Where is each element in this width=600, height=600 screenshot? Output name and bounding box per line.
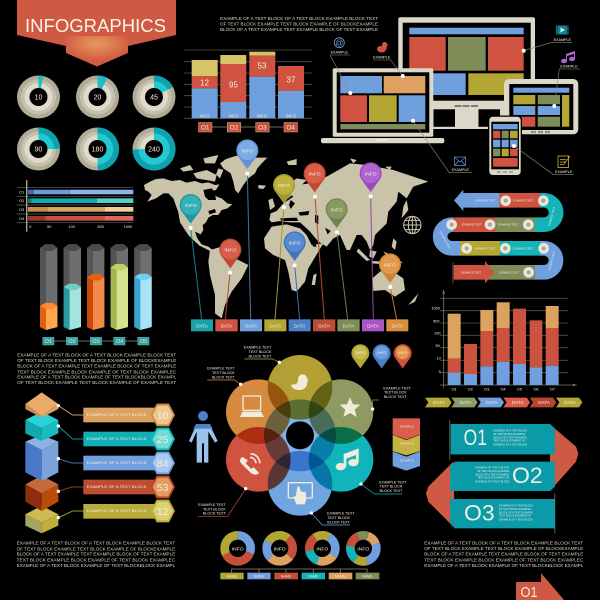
- devices illustration: [321, 17, 578, 176]
- map inland seas: [203, 188, 331, 247]
- horizontal bar chart: O1: [19, 190, 24, 194]
- person figure: [189, 411, 218, 463]
- icon: bird: [377, 42, 388, 52]
- overlapping circles: [226, 355, 373, 516]
- ribbon tag: [393, 418, 420, 471]
- map pins and data boxes: [180, 139, 408, 331]
- gauge 20: 20: [94, 94, 101, 102]
- step 02: EXAMPLE OF A TEXT BLOCK: [475, 480, 510, 483]
- text block: top: [220, 16, 378, 32]
- step 03: EXAMPLE OF A TEXT BLOCK: [499, 504, 533, 507]
- stacked bar chart: right: O1: [451, 388, 457, 392]
- venn labels: TEXT BLOCK: [384, 391, 407, 395]
- icon: envelope: [454, 157, 466, 166]
- small pins: INFO: [398, 351, 407, 355]
- ribbon labels: EXAMPLE TEXT: [547, 206, 556, 227]
- icon: at sign: @: [335, 38, 343, 48]
- donut gauges: [17, 76, 176, 170]
- text block: left middle: OF TEXT BLOCK EXAMPLE TEXT BLOCK EXAMPLE OF EXAMPLE TEXT: [17, 380, 177, 385]
- column labels: O1: [45, 339, 52, 345]
- text block: bottom right: EXAMPLE OF A TEXT BLOCK EXAMPLE OF TEXT BLOCKBLOCK EXAMPL: [424, 563, 584, 568]
- bar 25: 25: [157, 435, 169, 446]
- icon: notepad: [558, 156, 570, 168]
- text block: bottom left: EXAMPLE OF A TEXT BLOCK OF A TEXT BLOCK EXAMPLE BLOCK TEXT: [17, 541, 176, 546]
- text block: bottom right: OF TEXT BLOCK EXAMPLE TEXT BLOCK EXAMPLE OF BLOCKEXAMPLE: [424, 546, 583, 551]
- step 01: EXAMPLE OF A TEXT BLOCK: [493, 430, 528, 433]
- data boxes: DATA: [269, 323, 282, 328]
- step 03: OF TEXT BLOCK EXAMPLE: [499, 508, 531, 511]
- ribbon labels: EXAMPLE TEXT: [498, 223, 519, 227]
- bar 12: EXAMPLE OF A TEXT BLOCK: [87, 509, 147, 513]
- phone: [488, 116, 522, 176]
- gauge 10: [17, 76, 60, 118]
- venn labels: BLOCK TEXT: [212, 375, 235, 379]
- gauge 90: [17, 128, 60, 170]
- icon: film: [556, 26, 568, 34]
- text block: bottom right: BLOCK OF A TEXT EXAMPLE TEXT EXAMPLE BLOCK OF TEXT EXAMPLE: [424, 552, 583, 557]
- venn labels: BLOCK TEXT: [249, 354, 272, 358]
- stacked bar chart: top: 53: [258, 62, 267, 70]
- bar 84: 84: [157, 459, 169, 470]
- gauge 180: 180: [92, 146, 103, 154]
- venn labels: EXAMPLE TEXT: [383, 386, 412, 390]
- stacked bar chart: top: 37: [287, 76, 296, 84]
- connector dots: [57, 404, 60, 519]
- name boxes: NAME: [335, 574, 346, 578]
- title banner: INFOGRAPHICS: [25, 16, 166, 36]
- bar 84: EXAMPLE OF A TEXT BLOCK: [87, 461, 147, 465]
- horizontal bar chart: O2: [19, 199, 24, 203]
- 3D column chart: [40, 244, 152, 345]
- pin: north america: [180, 194, 202, 230]
- pin: europe: [273, 174, 295, 209]
- bar 12: [83, 500, 175, 522]
- stacked bar chart: top: [184, 50, 312, 132]
- step 03: [450, 499, 555, 528]
- data boxes: DATA: [318, 323, 331, 328]
- data boxes: DATA: [245, 323, 258, 328]
- column labels: O5: [140, 339, 147, 345]
- venn labels: EXAMPLE TEXT: [327, 512, 355, 516]
- device callouts: EXAMPLE: [373, 56, 391, 60]
- pin: russia east: [360, 162, 382, 198]
- step 01: BLOCK OF A TEXT EXAMPLE: [493, 436, 528, 439]
- stacked bar chart: right: O7: [550, 388, 555, 392]
- ribbon labels: EXAMPLE TEXT: [438, 230, 452, 250]
- small pins: [351, 344, 412, 368]
- ribbon path segments: [440, 200, 556, 272]
- horizontal bar chart: [17, 180, 133, 232]
- icon: laptop: [240, 396, 264, 417]
- donut 2: [261, 530, 298, 567]
- gauge 45: 45: [150, 94, 158, 102]
- stacked bar chart: right: [431, 290, 577, 392]
- text block: top: OF TEXT BLOCK EXAMPLE TEXT BLOCK EXAMPLE OF BLOCKEXAMPLE: [220, 22, 378, 27]
- venn labels: EXAMPLE TEXT: [198, 503, 226, 507]
- bar 53: EXAMPLE OF A TEXT BLOCK: [87, 485, 147, 489]
- cube: brown: [25, 476, 58, 511]
- name boxes: NAME: [362, 574, 373, 578]
- ribbon tag: EXAMPLE: [400, 459, 414, 463]
- data boxes: DATA: [221, 323, 233, 328]
- bar 53: 53: [157, 483, 169, 494]
- stacked bar chart: top: INFO: [286, 114, 297, 118]
- title banner: [17, 0, 176, 66]
- text block: left middle: [17, 352, 177, 385]
- icon: star: [340, 397, 360, 417]
- name boxes: NAME: [254, 574, 265, 578]
- stacked bar chart: top: 12: [200, 78, 209, 88]
- step 03: TEXT BLOCK EXAMPLE OF: [499, 515, 531, 518]
- name boxes: NAME: [227, 574, 238, 578]
- stacked bar chart: top: O1: [201, 124, 210, 132]
- venn labels: TEXT BLOCK: [203, 507, 226, 511]
- device callouts: EXAMPLE: [560, 65, 578, 69]
- step 02: BLOCK OF A TEXT EXAMPLE: [475, 473, 510, 476]
- step 01: [451, 424, 555, 454]
- venn labels: TEXT BLOCK: [327, 516, 351, 520]
- text block: left middle: OF TEXT BLOCK EXAMPLE TEXT BLOCK EXAMPLE OF BLOCKEXAMPLE: [17, 358, 176, 363]
- stacked bar chart: right: 10: [437, 357, 441, 361]
- monitor: [398, 17, 535, 129]
- isometric stack with labelled bars: [25, 392, 175, 533]
- device callouts: EXAMPLE: [555, 170, 573, 174]
- ribbon icons: [446, 195, 549, 278]
- icon: touch screen: [288, 483, 312, 504]
- horizontal bar chart: 1000: [124, 225, 132, 229]
- bar 10: EXAMPLE OF A TEXT BLOCK: [87, 413, 147, 417]
- step 02: EXAMPLE OF A TEXT BLOCK: [475, 467, 510, 470]
- gauge 240: 240: [148, 146, 160, 154]
- horizontal bar chart: 5: [29, 225, 31, 229]
- ribbon labels: EXAMPLE TEXT: [475, 246, 495, 250]
- snake ribbon process: [438, 190, 556, 283]
- icon: phone: [240, 454, 260, 474]
- stacked bar chart: right: O6: [533, 388, 539, 392]
- text block: bottom left: EXAMPLE OF A TEXT BLOCK EXAMPLE OF TEXT BLOCKBLOCK EXAMPL: [17, 563, 176, 568]
- stacked bar chart: right: 5: [439, 370, 441, 374]
- icon: globe: [404, 216, 421, 234]
- gauge 240: [132, 128, 176, 170]
- horizontal bar chart: 100: [69, 225, 75, 229]
- column labels: [43, 337, 149, 345]
- numbered ribbon panel: [426, 420, 578, 533]
- text block: bottom right: TEXT BLOCK EXAMPLE BLOCK EXAMPLE OF TEXT BLOCK EXAMPLEC: [424, 557, 583, 562]
- text block: bottom left: TEXT BLOCK EXAMPLE BLOCK EXAMPLE OF TEXT BLOCK EXAMPLEC: [17, 557, 175, 562]
- text block: bottom right: [424, 540, 584, 568]
- stacked bar chart: top: O2: [230, 124, 239, 132]
- ribbon tag: EXAMPLE: [400, 441, 414, 445]
- step 03: BLOCK OF A TEXT EXAMPLE: [499, 511, 533, 514]
- text block: left middle: EXAMPLE OF A TEXT BLOCK EXAMPLE OF TEXT BLOCKBLOCK EXAMPL: [17, 375, 177, 380]
- venn labels: BLOCK TEXT: [380, 489, 403, 493]
- pin: north america: INFO: [185, 203, 197, 209]
- venn labels: [198, 345, 412, 524]
- data arrow tags: DATA: [538, 400, 551, 405]
- world map: [144, 155, 428, 318]
- gauge 90: 90: [35, 146, 42, 154]
- column labels: O3: [92, 339, 100, 345]
- stacked bar chart: right: 100: [434, 332, 441, 336]
- venn labels: BLOCK TEXT: [203, 512, 226, 516]
- column 4: [111, 244, 128, 330]
- stacked bar chart: top: INFO: [199, 114, 210, 118]
- pin: europe: INFO: [278, 183, 290, 189]
- mini donut charts: INFO: [316, 546, 328, 552]
- device callouts: EXAMPLE: [554, 38, 572, 42]
- stacked bar chart: right: O3: [484, 388, 489, 392]
- ribbon labels: EXAMPLE TEXT: [461, 270, 481, 274]
- data arrow tags: [425, 398, 582, 407]
- name boxes: NAME: [308, 574, 319, 578]
- step 02: OF TEXT BLOCK EXAMPLE: [477, 470, 510, 473]
- cube: orange slab: [25, 392, 58, 418]
- data arrow tags: DATA: [459, 400, 472, 405]
- icon: bird: [291, 374, 309, 390]
- text block: top: EXAMPLE OF A TEXT BLOCK OF A TEXT BLOCK EXAMPLE BLOCK TEXT: [220, 16, 378, 21]
- donut 3: [304, 530, 340, 566]
- ribbon labels: EXAMPLE TEXT: [513, 199, 534, 203]
- text block: bottom right: EXAMPLE OF A TEXT BLOCK OF A TEXT BLOCK EXAMPLE BLOCK TEXT: [424, 540, 584, 545]
- ribbon labels: EXAMPLE TEXT: [547, 250, 556, 271]
- bar 25: [83, 428, 175, 450]
- gauge 45: [132, 76, 176, 118]
- venn labels: BLOCK TEXT: [384, 395, 407, 399]
- venn labels: TEXT BLOCK: [249, 350, 272, 354]
- venn labels: TEXT BLOCK: [380, 485, 403, 489]
- ribbon labels: EXAMPLE TEXT: [513, 246, 534, 250]
- data arrow tags: DATA: [564, 400, 577, 405]
- data boxes: DATA: [196, 323, 209, 328]
- mini donut charts: [220, 530, 381, 579]
- text block: top: BLOCK OF A TEXT EXAMPLE TEXT EXAMPLE BLOCK OF TEXT EXAMPLE: [220, 27, 378, 32]
- pin: africa: INFO: [289, 240, 301, 246]
- data boxes: DATA: [367, 323, 380, 328]
- step 01: EXAMPLE OF A TEXT BLOCK: [493, 443, 528, 446]
- horizontal bar chart: O3: [19, 208, 24, 212]
- mini donut charts: INFO: [232, 546, 244, 552]
- gauge 180: [76, 128, 119, 170]
- column labels: O2: [68, 339, 76, 345]
- data arrow tags: DATA: [512, 400, 524, 405]
- stacked bar chart: top: 95: [229, 80, 238, 90]
- bar 84: [83, 452, 175, 474]
- pin: greenland: INFO: [241, 148, 253, 154]
- step 03: O3: [464, 500, 495, 525]
- column 1: [40, 244, 57, 330]
- device callouts: EXAMPLE: [452, 168, 470, 172]
- venn labels: BLOCK TEXT: [327, 520, 351, 524]
- stacked bar chart: right: O2: [468, 388, 473, 392]
- connector lines: [58, 406, 83, 518]
- icon: music note: [336, 448, 359, 470]
- data boxes: DATA: [294, 323, 306, 328]
- cube: olive: [25, 506, 58, 533]
- step 01: O1: [464, 425, 487, 450]
- stacked bar chart: right: 1000: [431, 307, 440, 311]
- pin: south america: INFO: [224, 248, 236, 254]
- pin: australia: [379, 253, 401, 289]
- data arrow tags: DATA: [485, 400, 498, 405]
- pin: russia west: INFO: [309, 172, 321, 178]
- pin: russia west: [304, 163, 326, 199]
- text block: bottom left: OF TEXT BLOCK EXAMPLE TEXT BLOCK EXAMPLE OF BLOCKEXAMPLE: [17, 546, 175, 551]
- data arrow tags: DATA: [433, 400, 446, 405]
- text block: bottom left: BLOCK OF A TEXT EXAMPLE TEXT EXAMPLE BLOCK OF TEXT EXAMPLE: [17, 552, 175, 557]
- horizontal bar chart: O4: [19, 217, 24, 221]
- stacked bar chart: top: INFO: [257, 114, 268, 118]
- cube: blue: [25, 435, 58, 481]
- bar 53: [83, 476, 175, 498]
- pin: south america: [219, 239, 241, 275]
- gauge 10: 10: [35, 94, 42, 102]
- pin: russia east: INFO: [365, 171, 377, 177]
- step 03: EXAMPLE OF A TEXT BLOCK: [499, 518, 533, 521]
- column 3: [87, 244, 104, 330]
- text block: left middle: BLOCK OF A TEXT EXAMPLE TEXT EXAMPLE BLOCK OF TEXT EXAMPLE: [17, 364, 176, 369]
- ribbon labels: [438, 199, 556, 274]
- text block: bottom left: [17, 541, 176, 568]
- donut 1: [220, 531, 255, 566]
- pin: australia: INFO: [384, 262, 396, 268]
- venn callout lines: [198, 359, 402, 525]
- bar 10: 10: [157, 411, 169, 422]
- stacked bar chart: right: 50: [436, 344, 440, 348]
- name boxes: [220, 573, 379, 579]
- step 01: OF TEXT BLOCK EXAMPLE: [493, 433, 526, 436]
- bar 25: EXAMPLE OF A TEXT BLOCK: [87, 437, 147, 441]
- icon: music note: [561, 51, 575, 63]
- horizontal bar chart: 500: [98, 225, 104, 229]
- venn labels: EXAMPLE TEXT: [207, 367, 235, 371]
- data boxes: [191, 319, 408, 331]
- step 02: [450, 462, 555, 491]
- pin: africa: [284, 231, 306, 267]
- pin: central asia: [326, 198, 348, 234]
- venn labels: TEXT BLOCK: [212, 371, 235, 375]
- pin: central asia: INFO: [331, 207, 343, 213]
- column labels: O4: [116, 339, 123, 345]
- gauge 20: [76, 76, 119, 118]
- ribbon labels: EXAMPLE TEXT: [462, 223, 482, 227]
- small pins: INFO: [356, 351, 365, 355]
- bar 12: 12: [157, 507, 169, 518]
- device callouts: EXAMPLE: [331, 50, 349, 54]
- pin connector lines: [191, 174, 397, 319]
- text block: left middle: EXAMPLE OF A TEXT BLOCK OF A TEXT BLOCK EXAMPLE BLOCK TEXT: [17, 352, 177, 357]
- stacked bar chart: top: O3: [258, 124, 267, 132]
- step 02: O2: [512, 463, 543, 488]
- stacked bar chart: right: O5: [517, 388, 522, 392]
- donut 4: [345, 530, 381, 566]
- tablet: [504, 79, 578, 134]
- stacked bar chart: right: O4: [500, 388, 506, 392]
- data boxes: DATA: [391, 323, 404, 328]
- mini donut charts: INFO: [357, 546, 369, 552]
- data boxes: DATA: [343, 323, 355, 328]
- bar 10: [83, 404, 175, 426]
- map landmasses: [144, 155, 428, 318]
- step 01: TEXT BLOCK EXAMPLE OF: [493, 440, 526, 443]
- mini donut charts: INFO: [274, 546, 286, 552]
- venn labels: EXAMPLE TEXT: [379, 480, 407, 484]
- small pins: INFO: [377, 351, 386, 355]
- laptop: [321, 68, 444, 143]
- device callouts: [330, 26, 580, 174]
- stacked bar chart: right: 500: [433, 319, 440, 323]
- ribbon labels: EXAMPLE TEXT: [475, 199, 496, 203]
- venn flower diagram: [189, 344, 420, 525]
- step 02: TEXT BLOCK EXAMPLE OF: [477, 477, 510, 480]
- horizontal bar chart: 50: [47, 225, 51, 229]
- pin: greenland: [236, 139, 258, 176]
- column 5: [134, 244, 152, 330]
- cube: cyan: [25, 412, 58, 441]
- stacked bar chart: top: O4: [286, 124, 295, 132]
- page number arrow: [516, 573, 564, 600]
- column 2: [64, 244, 81, 330]
- venn labels: EXAMPLE TEXT: [244, 345, 272, 349]
- stacked bar chart: top: INFO: [228, 114, 239, 118]
- name boxes: NAME: [281, 574, 292, 578]
- ribbon tag: EXAMPLE: [400, 424, 414, 428]
- ribbon labels: EXAMPLE TEXT: [499, 270, 519, 274]
- text block: left middle: TEXT BLOCK EXAMPLE BLOCK EXAMPLE OF TEXT BLOCK EXAMPLEC: [17, 369, 176, 374]
